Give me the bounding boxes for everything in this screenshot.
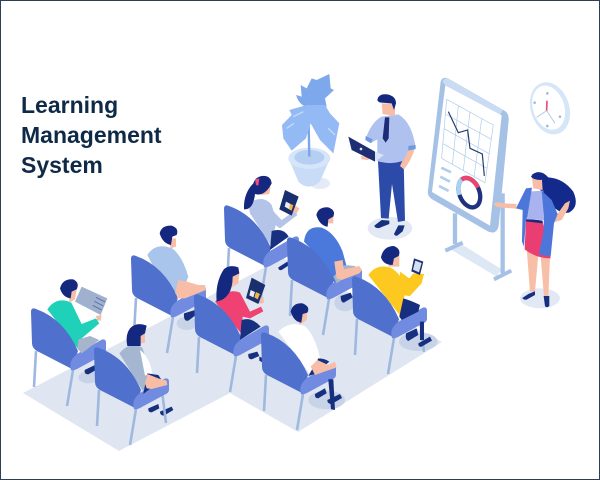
chair: front row far left bbox=[31, 308, 106, 406]
seated woman in grey vest bbox=[119, 324, 173, 416]
board list bbox=[439, 168, 451, 191]
chart line bbox=[448, 112, 484, 176]
chair: back row left bbox=[224, 205, 299, 303]
seated man in white shirt bbox=[278, 303, 345, 409]
board frame bbox=[428, 78, 509, 233]
chair: back row middle bbox=[287, 237, 362, 335]
presenter man bbox=[348, 94, 416, 240]
wall clock bbox=[523, 77, 577, 140]
board stand bbox=[445, 193, 511, 279]
seated woman in red bbox=[215, 266, 265, 363]
presentation board bbox=[428, 78, 511, 279]
man arm and pants on seat bbox=[333, 260, 362, 283]
title: Management bbox=[21, 122, 162, 148]
seated woman with tablet bbox=[244, 176, 299, 270]
seated man in blue shirt bbox=[304, 207, 357, 311]
teal person legs bbox=[77, 336, 99, 353]
grey vest woman lap bbox=[143, 373, 167, 394]
seated man in light blue shirt bbox=[147, 226, 197, 330]
chair: middle row centre bbox=[194, 294, 269, 392]
plant bbox=[282, 74, 339, 189]
white shirt man legs bbox=[308, 358, 342, 410]
chair: back row right bbox=[352, 276, 427, 374]
chair: middle row left bbox=[131, 255, 206, 353]
chair: front row centre left bbox=[94, 347, 169, 445]
title: System bbox=[21, 152, 103, 178]
light blue man arm bbox=[175, 280, 206, 298]
woman skirt on seat bbox=[270, 230, 289, 250]
seated person in teal bbox=[47, 279, 107, 383]
floor bbox=[23, 258, 442, 451]
red woman skirt bbox=[240, 319, 261, 340]
line chart grid bbox=[442, 99, 493, 183]
donut chart bbox=[454, 175, 484, 211]
seated man in yellow sweater bbox=[368, 246, 438, 351]
title bbox=[21, 92, 162, 178]
chair: front row right bbox=[261, 332, 336, 430]
title: Learning bbox=[21, 92, 118, 118]
yellow man legs bbox=[399, 298, 432, 347]
presenter woman bbox=[494, 172, 576, 308]
